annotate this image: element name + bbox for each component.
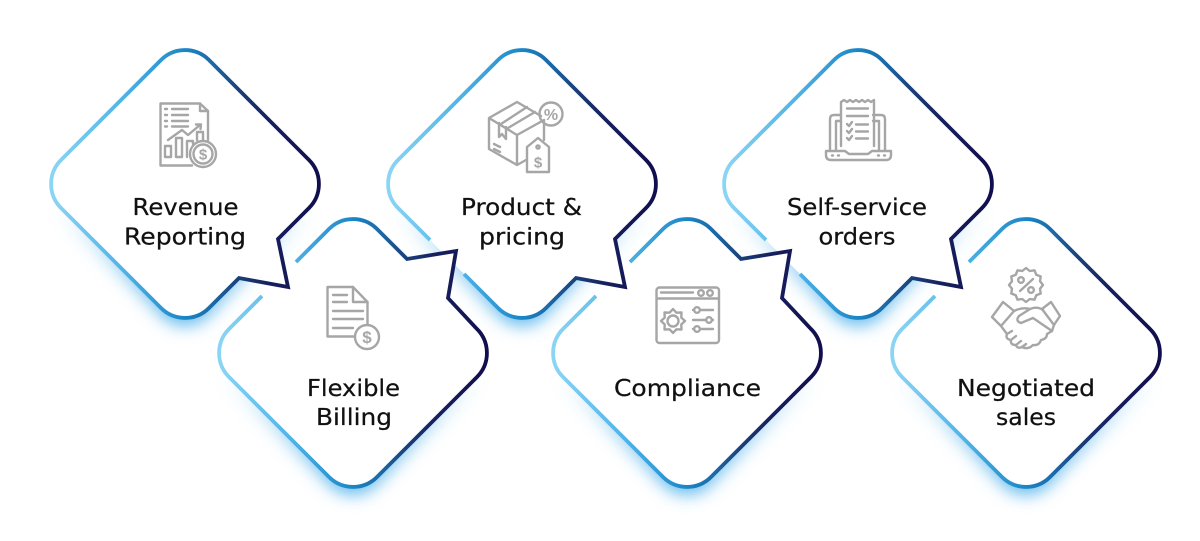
label: Product & [461,193,582,221]
label: Negotiated [957,374,1095,402]
icon: box with percent and price tag: % [544,107,558,124]
panel: Revenue Reporting [51,50,319,318]
icon: settings window [656,288,719,343]
icon: laptop with receipt checklist [826,100,891,160]
label: pricing [479,222,565,250]
label: sales [996,403,1056,431]
panel: Product & pricing [388,50,656,318]
icon: invoice with dollar coin: $ [362,328,372,347]
label: Billing [316,403,392,431]
icon: report with chart and coin: $ [199,146,208,164]
label: Compliance [614,374,761,402]
panel: Flexible Billing [219,219,487,487]
label: Reporting [124,222,246,250]
label: Flexible [307,374,400,402]
icon: percent badge and handshake [992,268,1060,348]
panel: Self-service orders [724,50,992,318]
panel: Negotiated sales [892,219,1160,487]
label: orders [818,222,896,250]
label: Self-service [787,193,927,221]
icon: report with chart and coin [160,104,216,167]
icon: box with percent and price tag [489,102,562,172]
icon: invoice with dollar coin [328,287,379,349]
icon: box with percent and price tag: $ [534,154,543,172]
panel: Compliance [553,219,821,487]
label: Revenue [132,193,238,221]
